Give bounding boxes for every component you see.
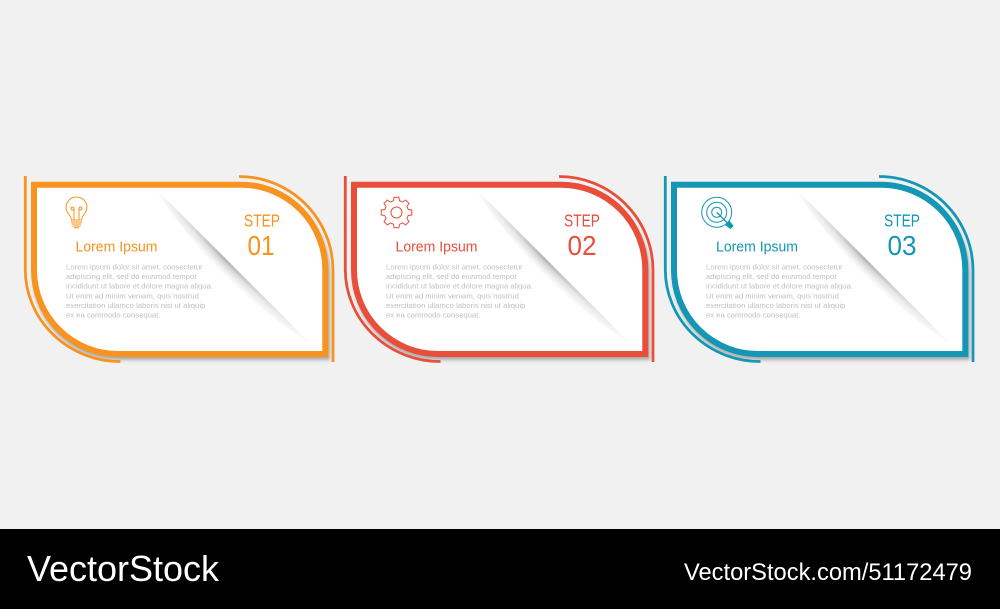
text block: Lorem ipsum dolor sit amet, consectetur [66,262,203,272]
card [674,185,965,354]
card shadow [33,187,330,360]
text block: incididunt ut labore et dolore magna aliqua. [66,282,213,291]
step number: 02 [568,230,596,261]
fold shadow [163,196,302,335]
outer accent line [25,176,333,362]
outer accent line [345,176,653,362]
fold shadow [483,196,622,335]
text block: Ut enim ad minim veniam, quis nostrud [66,291,199,300]
text block: ex ea commodo consequat. [66,310,160,320]
text block: Lorem ipsum dolor sit amet, consectetur [706,262,843,272]
icon: gear [381,197,412,228]
outer accent line [665,176,973,362]
text block: Lorem ipsum dolor sit amet, consectetur [386,262,523,272]
step number: 01 [248,230,274,261]
card [354,185,645,354]
text block: ex ea commodo consequat. [386,310,480,320]
text block: Ut enim ad minim veniam, quis nostrud [386,291,519,300]
step number: 03 [888,230,916,261]
panel: step 02 [345,176,653,362]
icon: light bulb [66,197,87,228]
footer bar [0,529,1000,609]
heading: Lorem Ipsum [396,240,478,256]
icon: target [702,197,733,228]
text block: adipiscing elit, sed do eiusmod tempor [386,272,517,281]
text block: exercitation ullamco laboris nisi ut aliquip [66,301,205,310]
text block: incididunt ut labore et dolore magna aliqua. [706,282,853,291]
footer logo: VectorStock [27,548,220,589]
footer url: VectorStock.com/51172479 [684,559,972,586]
text block: exercitation ullamco laboris nisi ut aliquip [386,301,525,310]
panel: step 01 [25,176,333,362]
card [34,185,325,354]
step label: STEP [244,210,280,230]
panel: step 03 [665,176,973,362]
card shadow [353,187,650,360]
fold shadow [803,196,942,335]
card shadow [673,187,970,360]
step label: STEP [884,210,920,230]
text block: adipiscing elit, sed do eiusmod tempor [66,272,197,281]
text block: adipiscing elit, sed do eiusmod tempor [706,272,837,281]
heading: Lorem Ipsum [716,240,798,256]
text block: Ut enim ad minim veniam, quis nostrud [706,291,839,300]
text block: incididunt ut labore et dolore magna aliqua. [386,282,533,291]
text block: ex ea commodo consequat. [706,310,800,320]
text block: exercitation ullamco laboris nisi ut aliquip [706,301,845,310]
heading: Lorem Ipsum [76,240,158,256]
step label: STEP [564,210,600,230]
